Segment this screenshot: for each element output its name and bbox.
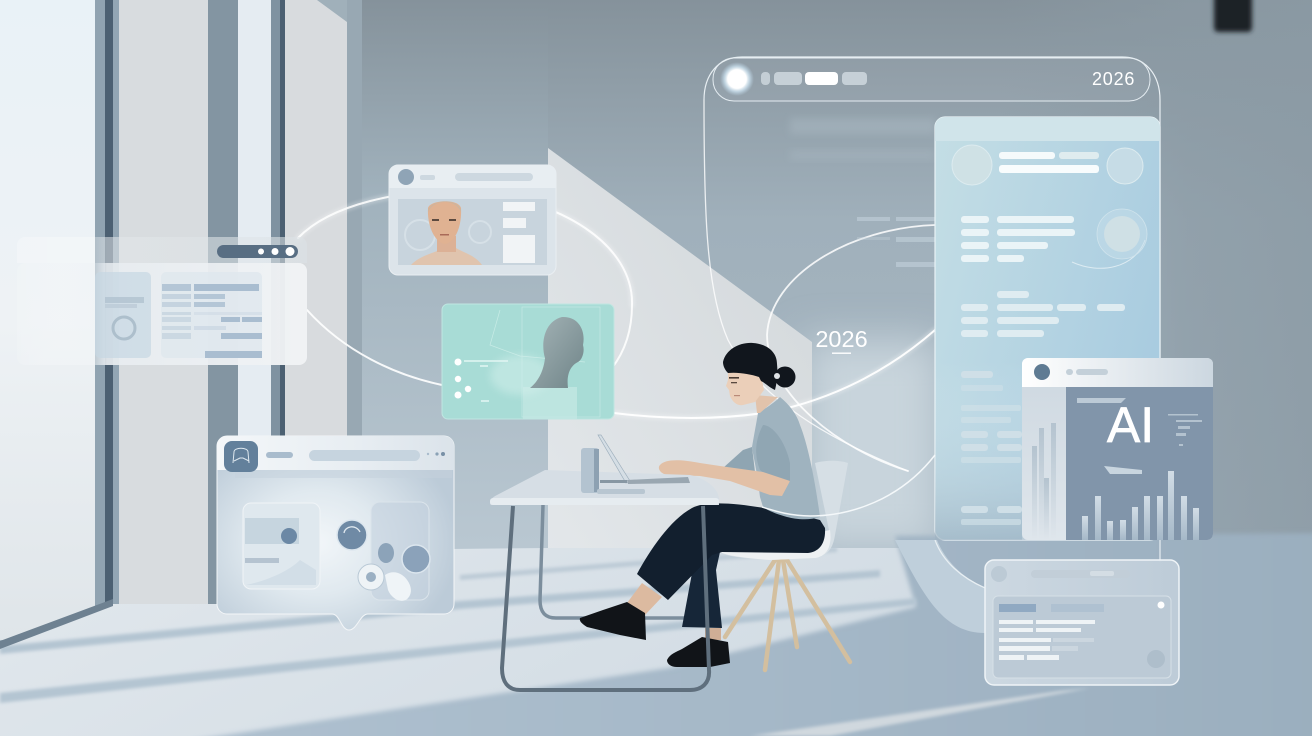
neck and face [726,370,778,413]
panel: chat bubble card [217,436,454,630]
icon: face badge [224,441,258,472]
text rows group 2 [961,291,1125,337]
chair [720,461,850,670]
text rows group 1 [961,216,1075,262]
left sub card with ring [95,272,151,358]
forearm and hand [659,460,790,496]
nav pills [761,72,867,85]
text rows group 3 [961,371,1022,525]
pill with dots [217,245,298,258]
speaker [581,448,645,494]
floating year label: 2026 [815,326,868,352]
icon: card badge [1034,364,1050,380]
near leg, thigh and shoe [580,503,825,640]
AI heading: AI [1107,397,1154,453]
bust [411,248,482,265]
person [580,343,825,667]
laptop [598,435,690,484]
icon: glass orb [1072,209,1147,268]
scatter of data dots [1168,414,1202,446]
panel: tall data panel [935,117,1160,540]
icon: glowing dot [720,62,754,96]
window sill [0,599,113,649]
side blocks [503,202,535,263]
header row [952,145,1143,185]
header bars [1066,369,1108,375]
left image tile [243,503,320,589]
floor light stripes [0,547,1090,736]
face [428,201,461,244]
panel: left translucent table card [17,237,307,365]
curved light band [895,540,985,633]
blurred ceiling object [1214,0,1252,32]
shoe [580,602,646,640]
window and pillars [0,0,362,640]
glowing connection curves [298,100,935,471]
desk: front leg [502,506,709,690]
desk top [490,470,719,505]
inner form [993,596,1171,678]
bar chart: left [1032,423,1056,540]
curve crossing person [762,455,935,516]
data dots [454,358,471,398]
far leg and shoe [667,530,730,667]
ankle [627,583,662,615]
faint caption strokes [464,360,508,402]
panel: bottom form card [985,560,1179,685]
scan head [530,317,584,388]
laptop and speaker [581,435,690,494]
far sleeve [723,447,755,477]
faint streaks behind frame [790,118,935,267]
sweater torso [752,397,820,519]
chair shell [720,461,848,560]
year label: 2026 [1092,69,1135,89]
right image tile [371,502,429,600]
dark chart area [1066,387,1213,540]
portrait image [398,199,547,265]
glass lens icons [337,520,430,601]
bar chart: right [1082,471,1199,540]
hair and bun [723,343,796,390]
desk: rear leg [540,505,690,618]
panel: teal scan card [442,304,614,419]
header bars [420,173,533,181]
top navigation bar [713,58,1150,101]
panel: avatar portrait card [389,165,556,275]
panel: large outline frame [704,57,1160,588]
right sub card with table bars [161,272,262,358]
floor [0,533,1312,736]
near sleeve [756,425,790,482]
header bars [266,450,445,461]
panel: AI chart card [1022,358,1213,540]
chair legs [725,560,850,670]
card header [991,566,1130,582]
sunlit wall patch [548,148,812,560]
icon: avatar badge [398,169,414,185]
